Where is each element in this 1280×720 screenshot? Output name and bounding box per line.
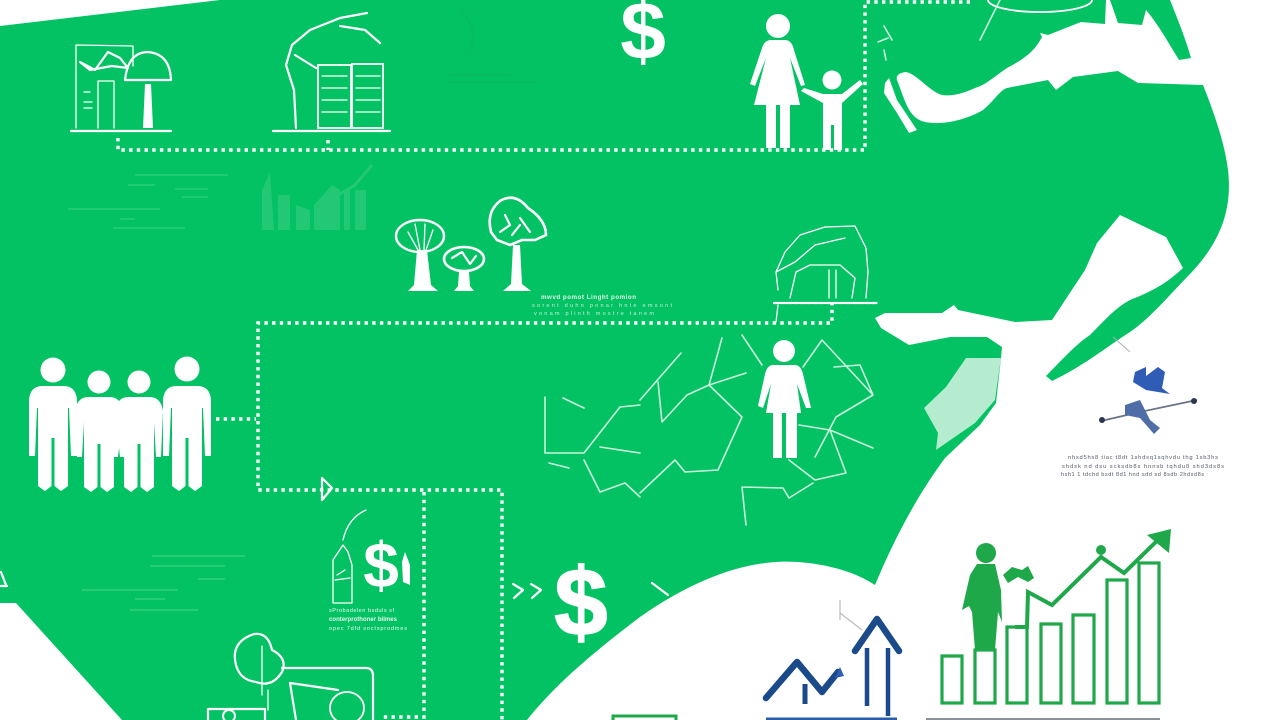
thin white stroke near coast [652,583,668,595]
green bar chart with person and growth arrow [926,529,1171,719]
large dollar sign: $ [554,549,608,656]
arrow: double chevrons toward dollar [513,584,541,598]
small caption under dollar: conterprothoner bilmes [329,617,398,623]
icon: person with dollar [333,510,410,603]
arrow: chevron on route [322,478,332,500]
icon: blue scooter device [1099,337,1197,434]
icon: tree and laptop frame [208,634,373,720]
small caption under dollar [329,608,407,632]
icon: tree and bookshelves [273,13,390,131]
icon: mother and child [750,14,863,150]
icon: group of four people [29,356,211,492]
faint text block lower left [82,556,245,610]
icon: three trees [396,198,546,291]
green box at bottom [613,716,676,720]
small caption under trees [532,294,672,317]
network map lines [545,335,873,525]
small caption under trees: mwvd pomot Linght pomion [541,294,636,301]
icon: building with tree [71,45,171,131]
top oval outline [988,0,1092,12]
icon: person with dollar: $ [363,529,399,601]
pale green coastal patch [924,358,1001,450]
dotted connector: upper route [118,2,970,150]
dotted connector: middle and lower routes [216,302,832,720]
small caption under dollar: sProbadelen bsduls sf [329,608,394,614]
small edge mark [1,572,7,586]
small caption under trees: vonam plinth mostre tanem [534,311,654,317]
blue arrow chart [766,600,899,719]
small caption under dollar: opec 7dfd soctsprodmes [329,626,407,632]
coastal white strip [884,78,917,133]
caption under device [1061,455,1224,478]
icon: woman on map [758,340,811,458]
caption under device: shdsk nd dsu scksdb8s hnnsb tqhdu8 shd3ds8s [1062,464,1224,470]
caption under device: nhsd5hs8 tiac t8dt 1shdsq1sqhvdu thg 1sb3hs [1068,455,1218,461]
icon: tree outline with bench [774,226,878,322]
icon: faint leaf watermark [450,10,535,82]
faint bar chart watermark [262,165,372,230]
icon: coast line detail [878,0,1000,60]
caption under device: hsh1 1 tdchd bsdt 8d1 hnd sdd sd 8sdb 2hdsd8s [1061,472,1204,478]
small caption under trees: sorent duhn ponar hnte emsont [532,303,672,309]
faint text block upper left [68,175,228,228]
